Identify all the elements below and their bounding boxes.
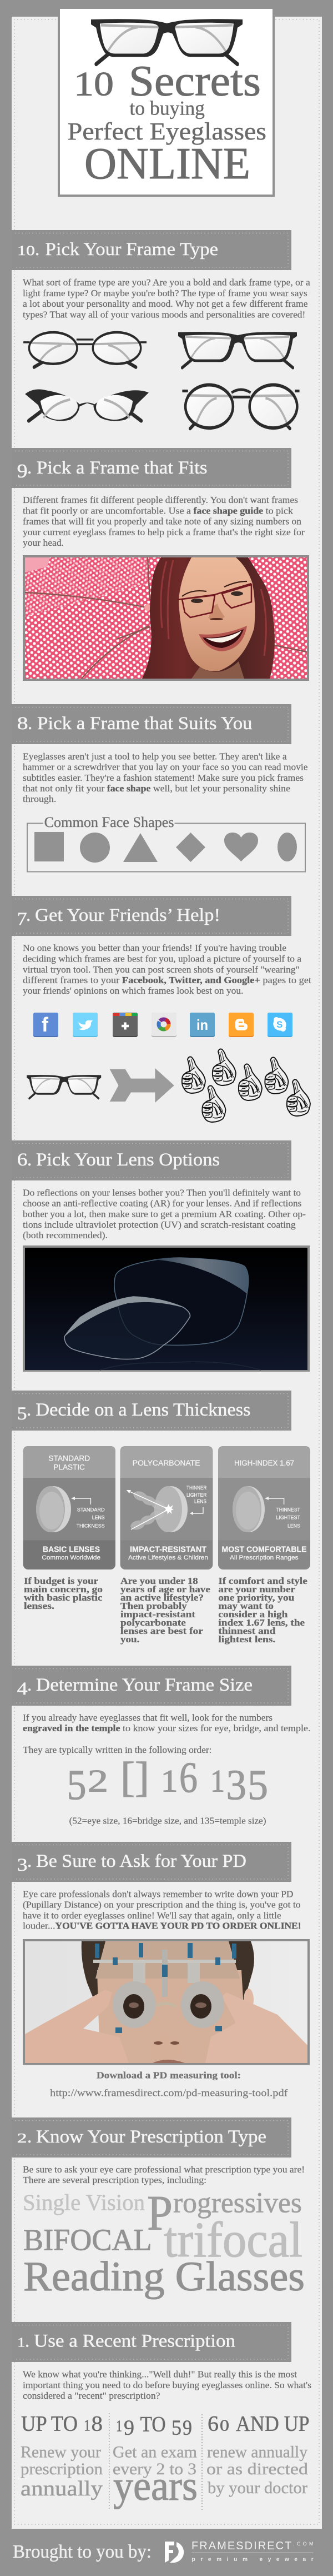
text: section 9 body: frames that will fit you properly and take note of any sizing numbers on	[23, 516, 301, 527]
panel: polycarbonate card	[120, 1446, 213, 1569]
text: section 9 body: Different frames fit different people differently. You don't want frames	[23, 495, 298, 505]
column: 19 to 59: 9	[183, 2416, 192, 2440]
text: section 2 body: Be sure to ask your eye care professional what prescription type you are!	[23, 2164, 305, 2175]
text: section 9 body: that fit poorly or are uncomfortable. Use a face shape guide to pick	[23, 505, 294, 516]
icon: thumbs up group	[182, 1049, 310, 1122]
word cloud: prescription types: rogressives	[173, 2188, 302, 2219]
text: section 8 body	[23, 751, 307, 804]
text: section 6 body: bother you a lot, then make sure to get a premium AR coating. Other op-	[23, 1209, 306, 1219]
heading: 8	[12, 704, 291, 744]
panel: standard plastic card	[23, 1446, 115, 1569]
column: 19 to 59	[113, 2412, 198, 2509]
text: section 10 body: types? That way all of your various moods and personalities are covered!	[23, 310, 305, 320]
heading: 7: 7	[17, 909, 27, 929]
frame size number: 52 [] 16 135: 5	[248, 1761, 268, 1808]
frame size number: 52 [] 16 135: 1	[161, 1764, 178, 1798]
word cloud: prescription types: Reading Glasses	[23, 2254, 305, 2300]
frame size number: 52 [] 16 135: 1	[210, 1764, 225, 1798]
text: section 1 body: considered a "recent" prescription?	[23, 2390, 160, 2401]
text: section 10 body: light frame type? Or maybe you're both? The type of frame you wear says	[23, 288, 307, 298]
panel: high-index card: LIGHTEST	[276, 1515, 300, 1521]
frame size number: 52 [] 16 135: []	[120, 1754, 149, 1801]
heading: 1: .	[25, 2331, 29, 2351]
text: basic lens note: If budget is your	[24, 1576, 98, 1586]
column: 60 and up: or as directed	[206, 2460, 308, 2478]
column: 19 to 59: 1	[116, 2418, 122, 2435]
column: 19 to 59: 9	[124, 2416, 134, 2440]
column: 60 and up: AND UP	[236, 2412, 310, 2435]
column: up to 18: annually	[21, 2477, 103, 2500]
title: 10 Secrets: ONLINE	[84, 139, 250, 188]
text: high-index note: If comfort and style	[218, 1576, 307, 1586]
heading: 2: Know Your Prescription Type	[36, 2127, 266, 2147]
column: 60 and up: 0	[220, 2418, 229, 2434]
heading: 8: Pick a Frame that Suits You	[37, 714, 253, 734]
frame size number: 52 [] 16 135: 6	[179, 1753, 198, 1801]
text: section 7 body: deciding which frames are best for you, upload a picture of yourself to a	[23, 954, 302, 964]
heading: 4: 4	[17, 1679, 28, 1699]
text: section 3 body: (Pupillary Distance) on your prescription and the thing is, you've got to	[23, 1899, 301, 1910]
text: high-index note: consider a high	[218, 1609, 287, 1620]
column: up to 18: prescription	[21, 2460, 103, 2478]
panel: standard plastic card: STANDARD	[77, 1507, 105, 1513]
heading: 9: 9	[17, 460, 28, 482]
text: high-index note: lightest lens.	[218, 1634, 275, 1645]
panel: common face shapes	[27, 814, 305, 871]
footer logo: FramesDirect: .COM	[293, 2541, 313, 2547]
panel: high-index card: LENS	[287, 1523, 300, 1529]
word cloud: prescription types: P	[147, 2186, 173, 2241]
heading: 2: .	[27, 2127, 32, 2147]
panel: high-index card	[218, 1446, 310, 1569]
heading: 7: Get Your Friends’ Help!	[35, 905, 220, 925]
heading: 3	[12, 1842, 291, 1882]
panel: high-index card: MOST COMFORTABLE	[222, 1546, 307, 1554]
text: section 3 body: YOU'VE GOTTA HAVE YOUR PD TO ORDER ONLINE!	[56, 1921, 301, 1931]
panel: high-index card: All Prescription Ranges	[230, 1554, 299, 1561]
title: 10 Secrets	[68, 57, 266, 188]
icon: linkedin	[190, 1013, 215, 1037]
text: high-index note	[218, 1576, 307, 1645]
panel: polycarbonate card: THINNER	[186, 1485, 207, 1491]
footer logo: FramesDirect	[165, 2540, 314, 2563]
text: section 2 body: There are several prescription types, including:	[23, 2175, 206, 2185]
text: polycarbonate note: lenses are best for	[120, 1626, 203, 1636]
word cloud: prescription types: trifocal	[164, 2213, 302, 2268]
text: basic lens note: lenses.	[24, 1601, 54, 1611]
heading: 10: Pick Your Frame Type	[46, 240, 218, 260]
heading: 8: .	[28, 714, 32, 734]
text: section 6 body: (both recommended).	[23, 1230, 108, 1240]
text: high-index note: index 1.67 lens, the	[218, 1617, 305, 1628]
text: section 8 body: Eyeglasses aren't just a tool to help you see better. They aren't like a	[23, 751, 287, 761]
arrow	[110, 1068, 174, 1103]
heading: 9: .	[27, 458, 32, 478]
caption: size key: (52=eye size, 16=bridge size, and 135=temple size)	[69, 1816, 266, 1826]
photo: smiling woman in red glasses under polka-dot umbrella	[23, 555, 309, 681]
panel: polycarbonate card: LENS	[194, 1499, 206, 1504]
text: section 1 body	[23, 2369, 311, 2401]
icon: linkedin: in	[196, 1017, 208, 1033]
callout: download label: Download a PD measuring tool:	[97, 2070, 241, 2080]
heading: 6: .	[27, 1150, 32, 1170]
text: section 9 body: your current eyeglass frames to help pick a frame that's the right size for	[23, 527, 305, 537]
frame size number: 52 [] 16 135: 5	[67, 1761, 87, 1808]
photo: man being fitted with PD measuring instrument	[23, 1939, 310, 2065]
heading: 3: Be Sure to Ask for Your PD	[36, 1851, 246, 1871]
column: 19 to 59: 5	[171, 2416, 181, 2440]
panel: standard plastic card: LENS	[92, 1515, 105, 1521]
heading: 6: 6	[17, 1150, 28, 1170]
icon: cat-eye glasses	[25, 390, 149, 421]
heading: 8: 8	[17, 714, 28, 734]
link text: http://www.framesdirect.com/pd-measuring-tool.pdf	[50, 2087, 287, 2099]
panel: standard plastic card: THICKNESS	[77, 1523, 105, 1529]
column: up to 18: 1	[84, 2418, 90, 2434]
title: 10 Secrets: 10	[74, 66, 114, 103]
text: section 8 body: subtitles easier. They're a fashion statement! Make sure you pick frames	[23, 773, 304, 783]
column: 19 to 59: TO	[140, 2412, 166, 2437]
text: high-index note: thinnest and	[218, 1626, 275, 1636]
text: basic lens note: main concern, go	[24, 1584, 103, 1595]
text: section 8 body: that not only fit your face shape well, but let your personality shine	[23, 783, 290, 794]
text: section 9 body	[23, 495, 305, 548]
panel: polycarbonate card: Active Lifestyles & Children	[128, 1554, 208, 1561]
column: 19 to 59: Get an exam	[113, 2443, 197, 2461]
panel: high-index card: THINNEST	[276, 1507, 300, 1513]
title: 10 Secrets: Secrets	[129, 57, 261, 105]
title: 10 Secrets: Perfect Eyeglasses	[68, 118, 266, 145]
text: polycarbonate note: Then probably	[120, 1601, 188, 1611]
heading: 6: Pick Your Lens Options	[36, 1150, 220, 1170]
column: 60 and up: by your doctor	[208, 2479, 307, 2497]
photo: clear lenses on dark background	[23, 1245, 310, 1372]
text: section 4 body: If you already have eyeglasses that fit well, look for the numbers	[23, 1712, 273, 1723]
text: section 3 body	[23, 1889, 301, 1931]
icon: title eyeglasses	[91, 19, 243, 64]
text: section 1 body: We know what you're thinking..."Well duh!" But really this is the most	[23, 2369, 297, 2379]
text: basic lens note: with basic plastic	[24, 1592, 102, 1603]
text: section 6 body: tions include ultraviolet protection (UV) and scratch-resistant coating	[23, 1219, 296, 1230]
heading: 1: Use a Recent Prescription	[34, 2331, 235, 2351]
frame size number: 52 [] 16 135: 2	[88, 1764, 108, 1798]
icon: blogger	[229, 1013, 254, 1037]
text: section 9 body: your head.	[23, 537, 64, 548]
social icons row	[33, 1013, 292, 1037]
column: up to 18	[21, 2412, 103, 2500]
text: section 8 body: through.	[23, 794, 56, 804]
panel: high-index card: HIGH-INDEX 1.67	[234, 1459, 294, 1467]
text: polycarbonate note: Are you under 18	[120, 1576, 198, 1586]
column: 19 to 59: years	[113, 2463, 198, 2509]
text: section 6 body: choose an anti-reflective coating (AR) for your lenses. And if reflections	[23, 1198, 301, 1208]
text: section 7 body: virtual tryon tool. Then you can post screen shots of yourself "wearing"	[23, 964, 300, 975]
heading: 3: 3	[17, 1855, 28, 1875]
heading: 4	[12, 1666, 291, 1706]
heading: 3: .	[27, 1851, 32, 1871]
text: section 1 body: important thing you need to do before buying eyeglasses online. So what's	[23, 2380, 311, 2390]
heading: 7	[12, 896, 291, 936]
icon: google plus	[113, 1013, 138, 1037]
text: section 6 body	[23, 1187, 306, 1240]
icon: skype	[268, 1013, 292, 1037]
text: polycarbonate note: an active lifestyle?	[120, 1592, 204, 1603]
text: section 10 body: a lot about your personality and mood. Why not get a few different frame	[23, 298, 307, 309]
heading: 10: .	[35, 240, 39, 260]
column: 60 and up: 6	[208, 2412, 219, 2435]
text: polycarbonate note: you.	[120, 1634, 139, 1645]
text: high-index note: may want to	[218, 1601, 274, 1611]
text: section 3 body: louder...	[23, 1921, 56, 1931]
text: section 7 body	[23, 943, 311, 996]
heading: 5	[12, 1391, 291, 1431]
icon: skype: S	[276, 1019, 282, 1030]
icon: small glasses	[27, 1075, 101, 1098]
face shape icons	[34, 832, 297, 863]
title block	[58, 9, 275, 197]
icon: picasa	[152, 1013, 176, 1037]
panel: standard plastic card: BASIC LENSES	[43, 1546, 100, 1554]
icon: oval frame glasses	[23, 332, 147, 367]
heading: 9: Pick a Frame that Fits	[37, 458, 208, 478]
text: section 6 body: Do reflections on your lenses bother you? Then you'll definitely want to	[23, 1187, 301, 1198]
heading: 7: .	[26, 905, 31, 925]
column: 19 to 59: every 2 to 3	[113, 2460, 196, 2478]
text: section 10 body	[23, 277, 310, 320]
text: section 4 body: engraved in the temple to know your sizes for eye, bridge, and temple.	[23, 1723, 311, 1733]
text: polycarbonate note: polycarbonate	[120, 1617, 186, 1628]
column: 60 and up: renew annually	[207, 2443, 307, 2461]
heading: 10	[12, 230, 291, 270]
heading: 5: .	[27, 1400, 31, 1420]
panel: standard plastic card: PLASTIC	[53, 1463, 85, 1472]
title: 10 Secrets: to buying	[129, 97, 205, 119]
heading: 4: .	[27, 1675, 32, 1695]
heading: 10: 10	[17, 243, 35, 258]
text: section 10 body: What sort of frame type are you? Are you a bold and dark frame type, or a	[23, 277, 310, 287]
text: section 2 body	[23, 2164, 305, 2185]
icon: twitter	[73, 1013, 98, 1037]
footer logo: FramesDirect: eyewear	[260, 2557, 314, 2563]
frame size number: 52 [] 16 135: 3	[226, 1761, 246, 1808]
legend title: Common Face Shapes	[44, 814, 174, 830]
text: section 3 body: have it to order eyeglasses online! We'll say that again, only a little	[23, 1910, 281, 1921]
heading: 5: 5	[17, 1404, 27, 1424]
text: polycarbonate note: years of age or have	[120, 1584, 210, 1595]
icon: FD monogram	[165, 2542, 184, 2563]
word cloud: prescription types	[23, 2186, 305, 2300]
text: section 3 body: Eye care professionals don't always remember to write down your PD	[23, 1889, 294, 1900]
word cloud: prescription types: BIFOCAL	[23, 2223, 152, 2257]
heading: 6	[12, 1140, 291, 1180]
text: section 4 body: They are typically written in the following order:	[23, 1745, 212, 1755]
heading: 9	[12, 448, 291, 488]
text: high-index note: are your number	[218, 1584, 295, 1595]
column: up to 18: Renew your	[21, 2443, 101, 2461]
text: section 7 body: different frames to your Facebook, Twitter, and Google+ pages to get	[23, 975, 311, 985]
heading: 5: Decide on a Lens Thickness	[36, 1400, 251, 1420]
panel: standard plastic card: Common Worldwide	[42, 1554, 100, 1561]
text: polycarbonate note: impact-resistant	[120, 1609, 196, 1620]
icon: facebook: f	[42, 1013, 49, 1036]
heading: 2: 2	[17, 2131, 27, 2146]
text: basic lens note	[24, 1576, 103, 1611]
panel: standard plastic card: STANDARD	[48, 1454, 90, 1463]
icon: round frame glasses	[182, 385, 300, 428]
heading: 1: 1	[17, 2335, 26, 2350]
footer: brought to you by: Brought to you by:	[13, 2542, 152, 2562]
column: up to 18: UP TO	[21, 2412, 78, 2435]
footer logo: FramesDirect: premium	[192, 2557, 248, 2563]
word cloud: prescription types: Single Vision	[23, 2189, 145, 2215]
heading: 2	[12, 2117, 291, 2158]
heading: 1	[12, 2322, 291, 2362]
panel: polycarbonate card: IMPACT-RESISTANT	[130, 1546, 206, 1554]
text: high-index note: one priority, you	[218, 1592, 294, 1603]
column: 60 and up	[206, 2412, 310, 2497]
panel: polycarbonate card: LIGHTER	[186, 1492, 207, 1498]
panel: polycarbonate card: POLYCARBONATE	[133, 1459, 200, 1467]
icon: facebook	[33, 1013, 58, 1037]
text: section 4 body	[23, 1712, 311, 1755]
footer logo: FramesDirect: FRAMESDIRECT	[191, 2540, 291, 2552]
column: up to 18: 8	[91, 2412, 103, 2435]
frame size number: 52 [] 16 135	[67, 1753, 268, 1808]
icon: rectangular frame glasses	[178, 332, 297, 368]
back lens	[114, 1258, 249, 1345]
heading: 4: Determine Your Frame Size	[36, 1675, 253, 1695]
front lens	[64, 1297, 190, 1359]
text: section 7 body: your friends' opinions on which frames look best on you.	[23, 985, 243, 996]
text: polycarbonate note	[120, 1576, 210, 1645]
text: section 8 body: hammer or a screwdriver that you lay on your face so you can read movie	[23, 761, 307, 772]
text: section 7 body: No one knows you better than your friends! If you're having trouble	[23, 943, 286, 953]
